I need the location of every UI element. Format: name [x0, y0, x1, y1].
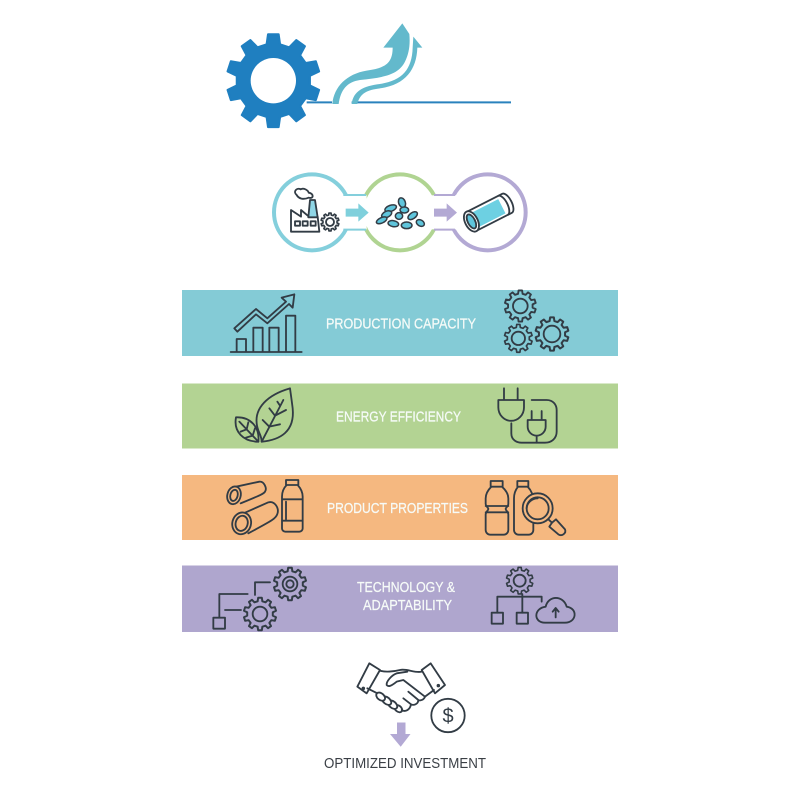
header: gear and growth arrow	[228, 23, 511, 127]
process flow	[274, 174, 526, 250]
label: OPTIMIZED INVESTMENT	[324, 756, 486, 772]
panel: product properties	[182, 475, 618, 540]
panel: energy efficiency	[182, 384, 618, 448]
heading: TECHNOLOGY &	[357, 579, 455, 596]
heading: PRODUCT PROPERTIES	[327, 500, 468, 517]
icon: small growth arrow	[352, 37, 422, 104]
ring: pellets	[362, 174, 438, 250]
panel: technology and adaptability	[182, 566, 618, 632]
heading: ENERGY EFFICIENCY	[336, 408, 461, 426]
icon: plugs	[498, 388, 557, 443]
icon: pellets	[375, 197, 426, 229]
icon: three gears	[505, 290, 568, 352]
ring: factory	[274, 174, 350, 250]
icon: pipe	[461, 191, 516, 234]
ring: pipe	[450, 174, 526, 250]
icon: bar chart with arrow	[231, 294, 302, 352]
baseline	[307, 99, 511, 105]
icon: large growth arrow	[332, 23, 410, 104]
connector: teal	[342, 195, 367, 230]
icon: connected gears	[213, 568, 306, 630]
icon: leaves	[236, 388, 293, 442]
outcome: optimized investment	[324, 663, 486, 772]
icon: factory	[291, 189, 339, 232]
arrow: purple	[434, 203, 457, 222]
icon: dollar coin	[431, 699, 465, 732]
connector: purple	[432, 195, 457, 230]
panel: production capacity	[182, 290, 618, 356]
icon: blue gear	[228, 34, 319, 127]
heading line two: ADAPTABILITY	[363, 597, 452, 614]
heading: PRODUCTION CAPACITY	[326, 316, 476, 332]
icon: handshake	[357, 663, 445, 714]
icon: dollar coin: $	[442, 706, 454, 728]
arrow: down	[390, 722, 410, 747]
icon: bottles with magnifier	[486, 481, 565, 535]
arrow: teal	[346, 203, 369, 222]
icon: tubes and bottle	[225, 480, 303, 536]
icon: network and cloud	[492, 567, 575, 624]
